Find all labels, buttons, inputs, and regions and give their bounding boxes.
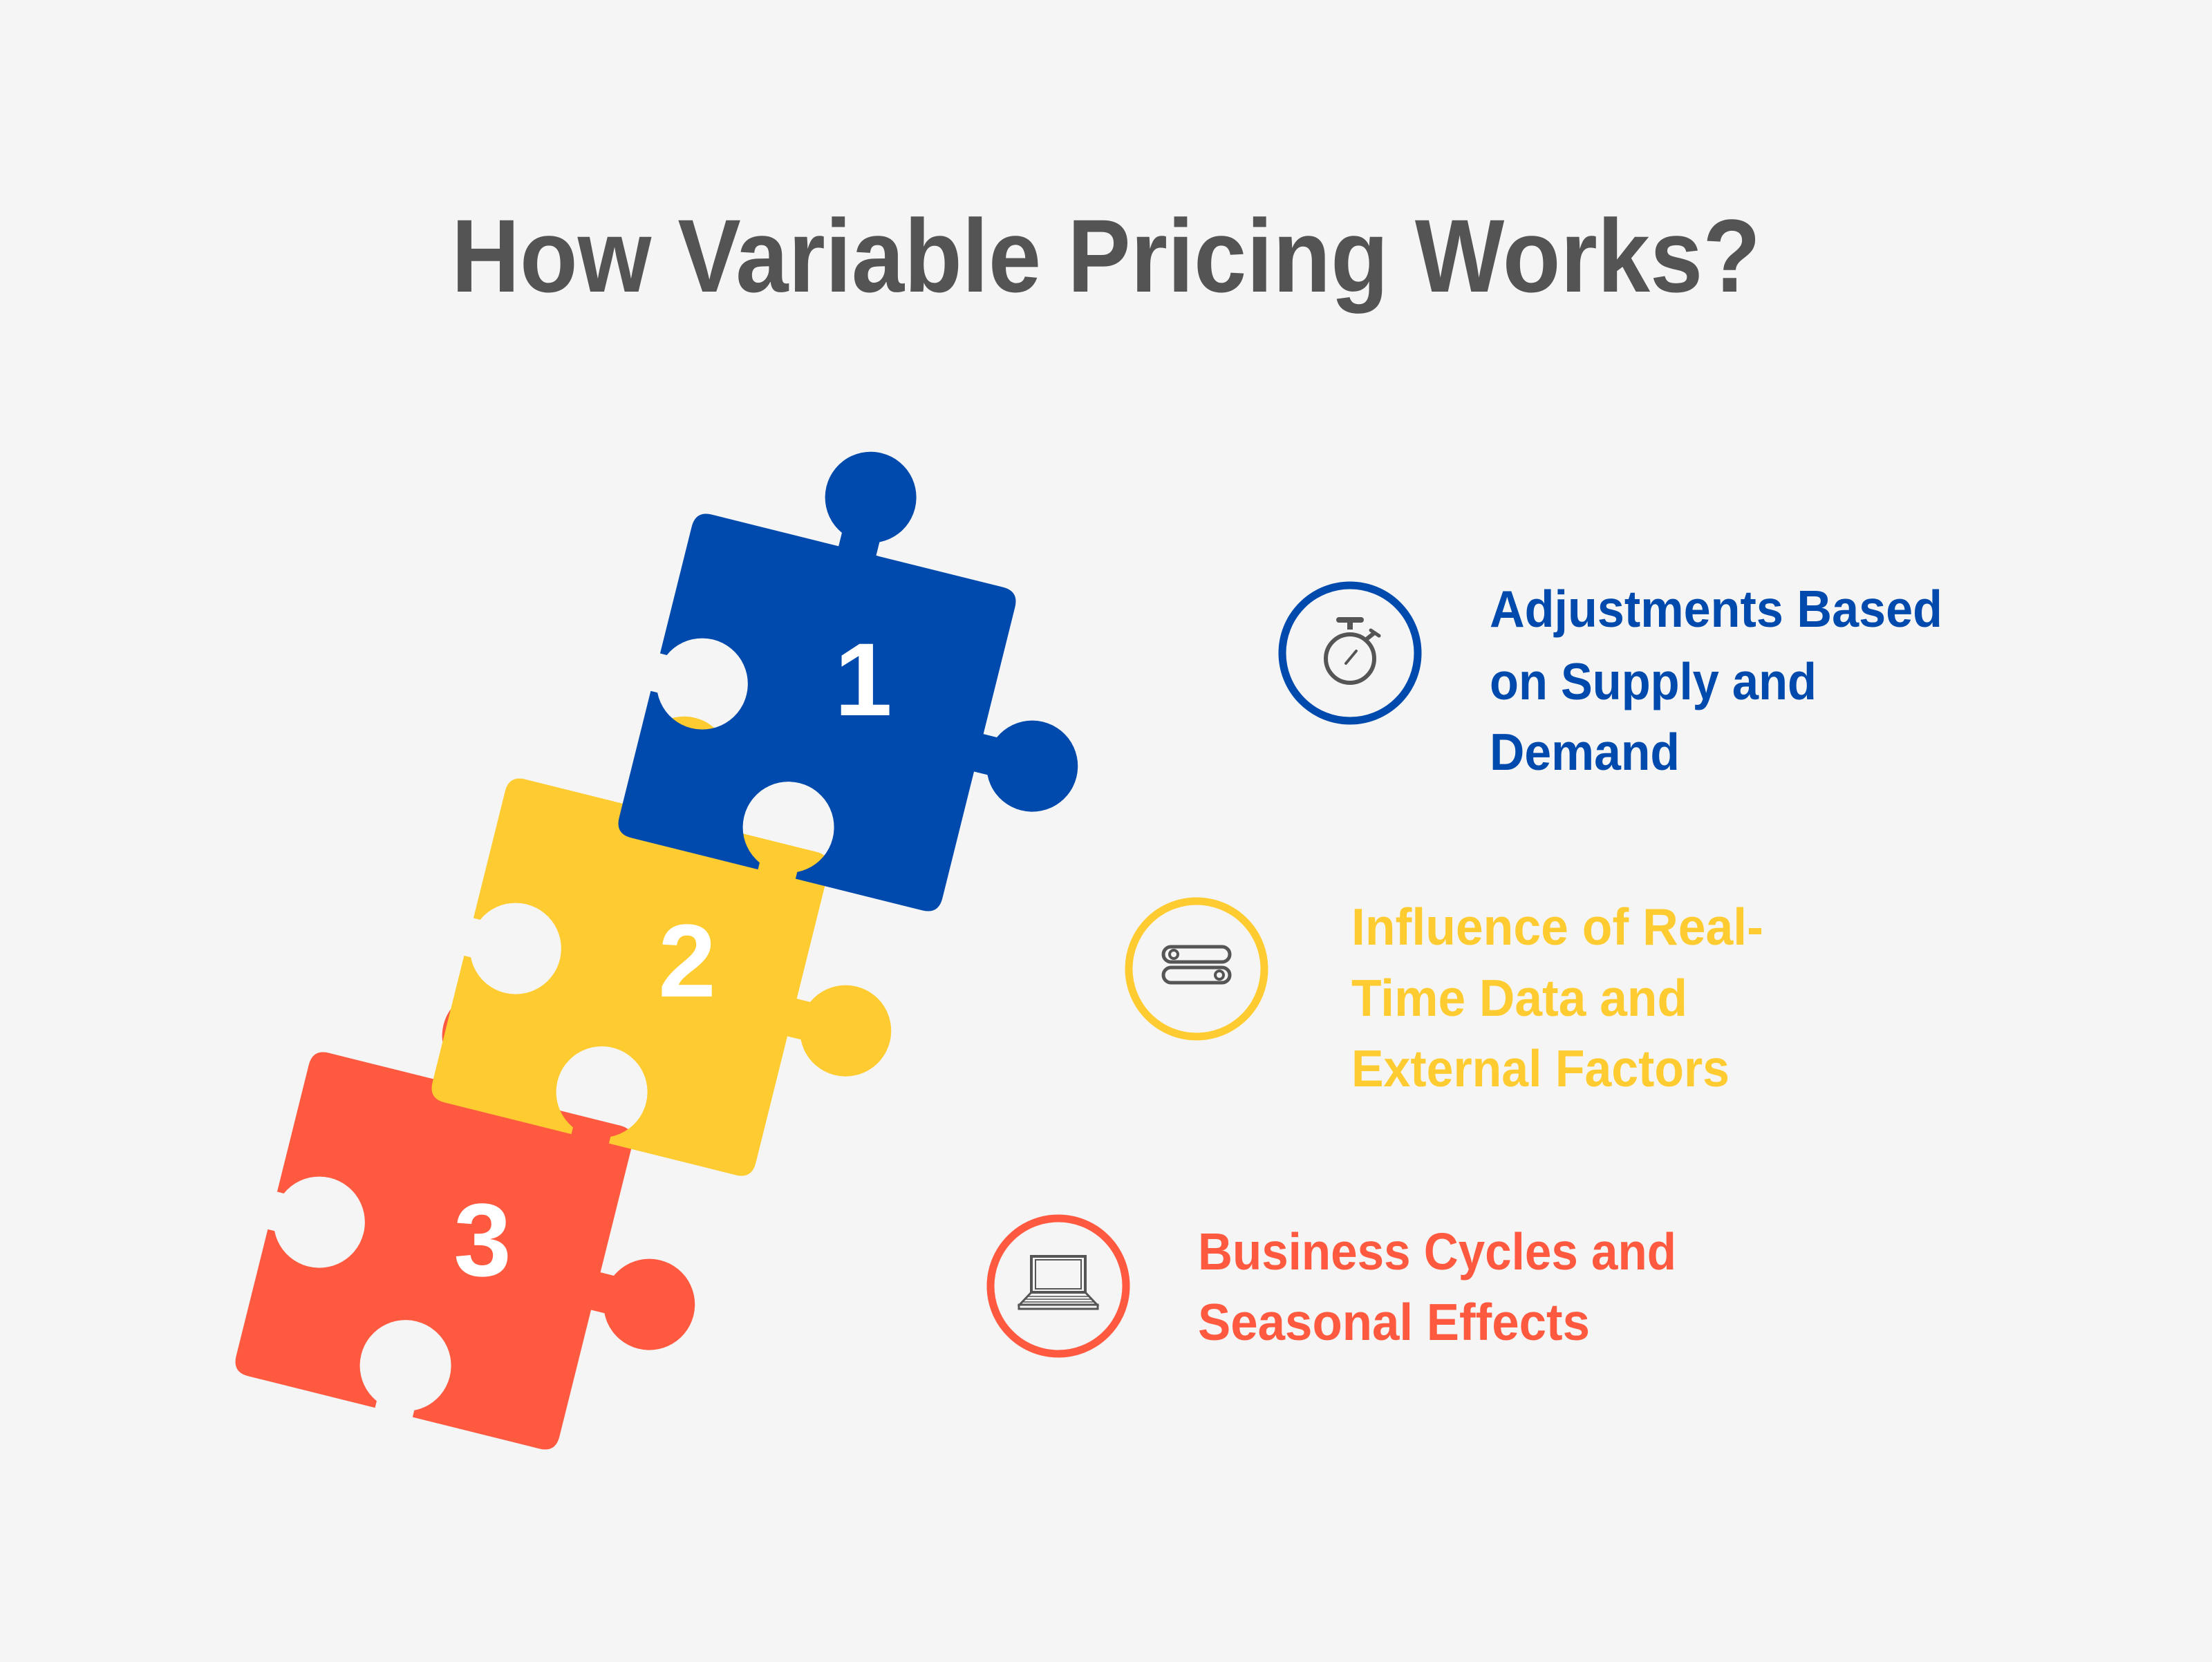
puzzle piece 3 (red) bbox=[232, 951, 758, 1477]
text: adjustments bbox=[1490, 580, 1942, 781]
puzzle piece 1 (blue): 1 bbox=[834, 621, 892, 737]
icon: stopwatch in blue circle bbox=[1282, 585, 1418, 721]
text: adjustments: on Supply and bbox=[1490, 652, 1817, 710]
puzzle piece 3 (red): 3 bbox=[453, 1182, 512, 1298]
text: business cycles: Business Cycles and bbox=[1198, 1222, 1676, 1281]
text: influence: Time Data and bbox=[1351, 969, 1687, 1027]
puzzle piece 1 (blue) bbox=[615, 413, 1141, 938]
icon: toggles in yellow circle bbox=[1129, 901, 1264, 1037]
text: influence bbox=[1351, 898, 1763, 1097]
text: adjustments: Demand bbox=[1490, 723, 1680, 781]
title: How Variable Pricing Works? bbox=[451, 198, 1761, 314]
text: business cycles: Seasonal Effects bbox=[1198, 1293, 1590, 1351]
puzzle piece 2 (yellow): 2 bbox=[658, 903, 716, 1019]
text: influence: External Factors bbox=[1351, 1039, 1730, 1097]
icon: laptop in red circle bbox=[991, 1218, 1126, 1354]
text: business cycles bbox=[1198, 1222, 1676, 1351]
text: influence: Influence of Real- bbox=[1351, 898, 1763, 956]
text: adjustments: Adjustments Based bbox=[1490, 580, 1942, 638]
puzzle piece 2 (yellow) bbox=[429, 677, 955, 1203]
